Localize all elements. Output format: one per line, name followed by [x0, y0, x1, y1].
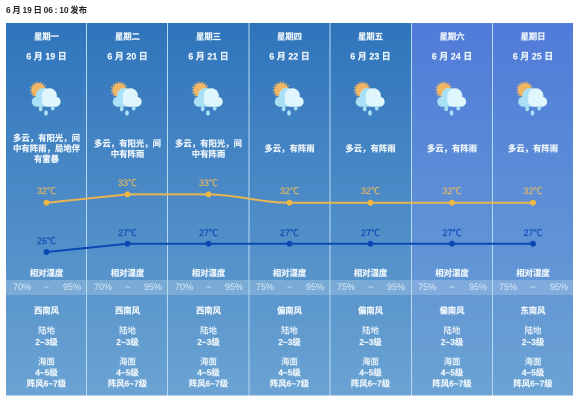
panel: Wednesday: 相对湿度: [192, 268, 226, 278]
panel: Tuesday: 95%: [144, 282, 162, 292]
panel: Monday: 2~3级: [35, 337, 58, 347]
panel: Friday: 2~3级: [359, 337, 382, 347]
panel: Thursday: 相对湿度: [273, 268, 307, 278]
panel: Monday: 阵风6~7级: [27, 378, 67, 388]
panel: Wednesday: 多云，有阳光，间: [175, 138, 242, 148]
panel: Thursday: 75%: [256, 282, 274, 292]
panel: Saturday: 2~3级: [441, 337, 464, 347]
chart: low temperature line: 27℃: [280, 228, 299, 238]
panel: Saturday: 海面: [444, 356, 460, 366]
panel: Monday: 陆地: [38, 326, 55, 336]
icon: partly cloudy with showers: [30, 82, 61, 116]
panel: Wednesday: ~: [206, 282, 211, 292]
panel: Sunday: 6 月 25 日: [513, 52, 553, 62]
panel: Wednesday: 中有阵雨: [192, 149, 225, 159]
chart: high temperature line: [37, 178, 543, 206]
panel: Tuesday: 陆地: [119, 326, 136, 336]
panel: Saturday: 6 月 24 日: [432, 52, 472, 62]
chart: low temperature line: [37, 228, 543, 255]
panel: Friday: 4~5级: [359, 368, 382, 378]
panel: Tuesday: ~: [125, 282, 130, 292]
panel: Friday: 相对湿度: [354, 268, 388, 278]
panel: Sunday: 相对湿度: [516, 268, 550, 278]
panel: Monday: 海面: [38, 356, 55, 366]
panel: Saturday: 多云，有阵雨: [427, 144, 477, 154]
panel: Thursday: 阵风6~7级: [270, 378, 310, 388]
chart: high temperature line: 33℃: [118, 178, 137, 188]
panel: Tuesday: 相对湿度: [111, 268, 145, 278]
panel: Friday: [337, 32, 405, 388]
panel: Monday: 星期一: [34, 32, 60, 42]
panel: Wednesday: 阵风6~7级: [189, 378, 229, 388]
icon: partly cloudy with showers: [273, 82, 304, 116]
chart: high temperature line: 32℃: [37, 186, 56, 196]
panel: Wednesday: 陆地: [200, 326, 217, 336]
panel: Thursday: 95%: [306, 282, 324, 292]
panel: Sunday: 阵风6~7级: [513, 378, 553, 388]
panel: Saturday: 相对湿度: [435, 268, 469, 278]
panel: Saturday: 陆地: [444, 326, 461, 336]
panel: Tuesday: [94, 32, 162, 388]
panel: Thursday: 偏南风: [277, 306, 303, 316]
panel: Friday: 阵风6~7级: [351, 378, 391, 388]
panel: Thursday: 多云，有阵雨: [264, 144, 315, 154]
panel: Sunday: [499, 32, 568, 388]
panel: Sunday: 75%: [499, 282, 517, 292]
panel: Saturday: 4~5级: [441, 368, 464, 378]
panel: Saturday: 偏南风: [439, 306, 465, 316]
panel: Saturday: ~: [449, 282, 455, 292]
icon: partly cloudy with showers: [517, 82, 547, 116]
panel: Monday: 多云，有阳光，间: [13, 133, 80, 143]
panel: Sunday: 陆地: [525, 326, 542, 336]
panel: Sunday: 4~5级: [522, 368, 545, 378]
panel: Tuesday: 70%: [94, 282, 112, 292]
panel: Saturday: [418, 32, 487, 388]
icon: partly cloudy with showers: [192, 82, 223, 116]
panel: Saturday: 95%: [469, 282, 487, 292]
panel: Tuesday: 中有阵雨: [111, 149, 144, 159]
panel: Tuesday: 西南风: [115, 306, 141, 316]
panel: Sunday: 星期日: [520, 32, 546, 42]
panel: Sunday: 东南风: [520, 306, 546, 316]
panel: Wednesday: 6 月 21 日: [188, 52, 229, 62]
panel: Sunday: 95%: [550, 282, 568, 292]
panel: Wednesday: 2~3级: [197, 337, 220, 347]
icon: partly cloudy with showers: [111, 82, 142, 116]
chart: low temperature line: 27℃: [442, 228, 462, 238]
panel: Friday: ~: [368, 282, 373, 292]
chart: low temperature line: 27℃: [199, 228, 218, 238]
panel: Monday: [13, 32, 81, 388]
chart: high temperature line: 32℃: [523, 186, 543, 196]
chart: high temperature line: 32℃: [442, 186, 462, 196]
panel: Tuesday: 阵风6~7级: [108, 378, 148, 388]
icon: partly cloudy with showers: [436, 82, 466, 116]
panel: Wednesday: 西南风: [196, 306, 222, 316]
panel: Monday: 有雷暴: [34, 154, 60, 164]
panel: Sunday: 多云，有阵雨: [508, 144, 558, 154]
panel: Monday: ~: [44, 282, 49, 292]
panel: Tuesday: 4~5级: [116, 368, 139, 378]
panel: Thursday: 海面: [281, 356, 298, 366]
panel: Friday: 陆地: [362, 326, 379, 336]
panel: Thursday: 2~3级: [278, 337, 301, 347]
panel: Wednesday: 4~5级: [197, 368, 220, 378]
panel: Saturday: 75%: [418, 282, 436, 292]
panel: Thursday: [256, 32, 324, 388]
panel: Friday: 海面: [362, 356, 379, 366]
panel: Friday: 星期五: [358, 32, 383, 42]
icon: partly cloudy with showers: [354, 82, 385, 116]
panel: Monday: 相对湿度: [30, 268, 64, 278]
issue time heading: 6 月 19 日 06 : 10 发布: [6, 5, 87, 15]
panel: Monday: 6 月 19 日: [26, 52, 67, 62]
panel: Friday: 6 月 23 日: [350, 52, 391, 62]
panel: Saturday: 阵风6~7级: [432, 378, 472, 388]
panel: Friday: 多云，有阵雨: [345, 144, 396, 154]
panel: Monday: 西南风: [34, 306, 60, 316]
panel: Tuesday: 星期二: [115, 32, 140, 42]
panel: Thursday: ~: [287, 282, 292, 292]
panel: Friday: 75%: [337, 282, 355, 292]
panel: Wednesday: 70%: [175, 282, 193, 292]
panel: Saturday: 星期六: [439, 32, 465, 42]
panel: Thursday: 6 月 22 日: [269, 52, 310, 62]
panel: Monday: 中有阵雨，局地伴: [13, 144, 81, 154]
chart: low temperature line: 27℃: [361, 228, 380, 238]
panel: Sunday: ~: [530, 282, 536, 292]
panel: Friday: 95%: [387, 282, 405, 292]
chart: low temperature line: 27℃: [523, 228, 543, 238]
panel: Tuesday: 2~3级: [116, 337, 139, 347]
panel: Thursday: 4~5级: [278, 368, 301, 378]
panel: Wednesday: [175, 32, 243, 388]
panel: Monday: 4~5级: [35, 368, 58, 378]
chart: high temperature line: 32℃: [280, 186, 299, 196]
chart: low temperature line: 27℃: [118, 228, 137, 238]
panel: Wednesday: 海面: [200, 356, 217, 366]
panel: Tuesday: 多云，有阳光，间: [94, 138, 161, 148]
panel: Monday: 95%: [63, 282, 81, 292]
panel: Thursday: 星期四: [277, 32, 302, 42]
chart: high temperature line: 33℃: [199, 178, 218, 188]
chart: low temperature line: 26℃: [37, 236, 56, 246]
chart: high temperature line: 32℃: [361, 186, 380, 196]
panel: Tuesday: 海面: [119, 356, 136, 366]
panel: Sunday: 海面: [525, 356, 541, 366]
panel: Friday: 偏南风: [358, 306, 384, 316]
panel: Monday: 70%: [13, 282, 31, 292]
panel: Wednesday: 星期三: [196, 32, 221, 42]
panel: Sunday: 2~3级: [522, 337, 545, 347]
panel: Thursday: 陆地: [281, 326, 298, 336]
panel: Tuesday: 6 月 20 日: [107, 52, 148, 62]
panel: Wednesday: 95%: [225, 282, 243, 292]
